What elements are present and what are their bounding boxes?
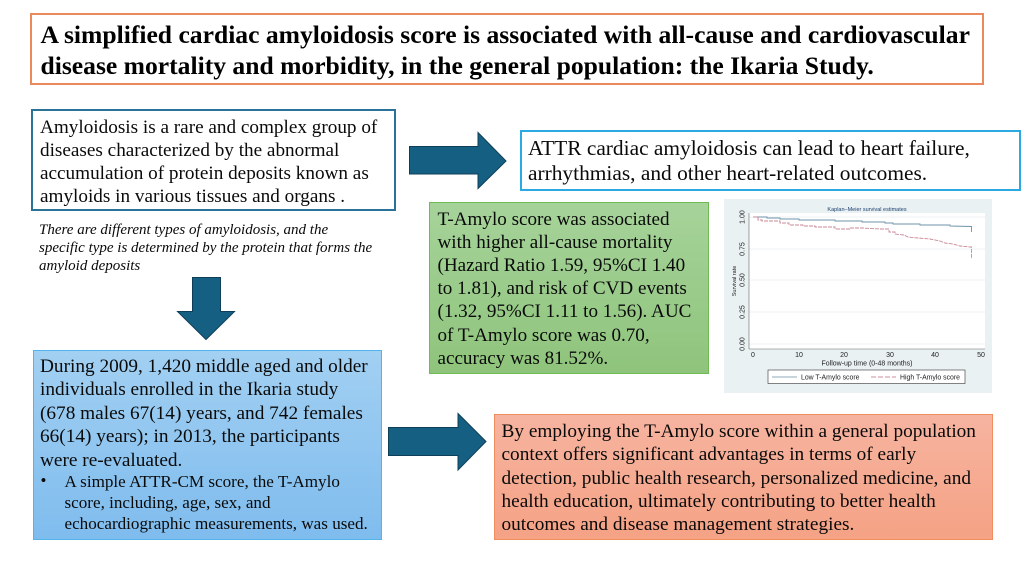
conclusion text: detection, public health research, personalized medicine, and [502,468,971,489]
high score curve [753,217,972,259]
title: disease mortality and morbidity, in the general population: the Ikaria Study. [40,51,874,80]
results text: with higher all-cause mortality [438,232,672,253]
conclusion text [502,421,976,535]
italic note on amyloidosis types [39,222,372,274]
methods bullet text: A simple ATTR-CM score, the T-Amylo [64,472,340,491]
low score curve [753,217,972,232]
panel: ATTR outcomes [520,130,1021,190]
panel: amyloidosis definition [31,109,396,211]
definition text: amyloids in various tissues and organs . [40,186,345,207]
italic note on amyloidosis types: There are different types of amyloidosis, and the [39,222,328,238]
axis labels: 0 [751,352,755,359]
conclusion text: context offers significant advantages in terms of early [502,444,916,465]
methods text: During 2009, 1,420 middle aged and older [40,356,368,377]
chart title: Kaplan–Meier survival estimates [827,207,907,213]
methods bullet text: echocardiographic measurements, was used. [64,514,368,533]
panel: conclusion [494,414,993,540]
results text: accuracy was 81.52%. [438,348,608,369]
axis labels: Survival rate [732,266,738,296]
axis labels: 0.50 [740,273,746,287]
methods text: 66(14) years); in 2013, the participants [40,426,340,447]
results text: (1.32, 95%CI 1.11 to 1.56). AUC [438,301,691,322]
ATTR text [528,136,970,184]
definition text: accumulation of protein deposits known as [40,163,369,184]
axes [749,213,985,349]
italic note on amyloidosis types: amyloid deposits [39,258,140,274]
definition text [40,116,378,207]
axis labels: 10 [795,352,803,359]
italic note on amyloidosis types: specific type is determined by the protein that forms the [39,240,372,256]
axis labels: 40 [931,352,939,359]
ATTR text: ATTR cardiac amyloidosis can lead to heart failure, [528,136,970,160]
axis labels: 0.75 [740,242,746,256]
methods text: individuals enrolled in the Ikaria study [40,379,338,400]
methods bullet: • [40,471,46,490]
ATTR text: arrhythmias, and other heart-related outcomes. [528,160,927,184]
conclusion text: health education, ultimately contributing to better health [502,491,936,512]
axis labels [732,210,985,368]
axis labels: 30 [886,352,894,359]
axis labels: 50 [977,352,985,359]
methods text [40,356,368,471]
results text: to 1.81), and risk of CVD events [438,278,687,299]
axis labels: 1.00 [740,210,746,224]
title box [30,13,984,85]
legend [768,370,965,384]
methods text: (678 males 67(14) years, and 742 females [40,403,363,424]
title [40,20,970,80]
axis labels: 0.00 [740,337,746,351]
results text [438,208,691,369]
panel: T-Amylo results [429,202,709,374]
definition text: diseases characterized by the abnormal [40,140,339,161]
axis labels: Follow-up time (0-48 months) [821,360,913,368]
conclusion text: outcomes and disease management strategies. [502,514,854,535]
title: A simplified cardiac amyloidosis score is associated with all-cause and cardiovascular [40,20,970,49]
methods text: were re-evaluated. [40,450,182,471]
legend: High T-Amylo score [900,374,960,382]
results text: T-Amylo score was associated [438,208,670,230]
results text: of T-Amylo score was 0.70, [438,325,650,346]
results text: (Hazard Ratio 1.59, 95%CI 1.40 [438,255,685,276]
chart: Kaplan-Meier survival curves [724,199,992,393]
methods bullet text [64,472,368,533]
panel: study methods [32,350,382,540]
axis labels: 20 [840,352,848,359]
methods bullet text: score, including, age, sex, and [64,493,271,512]
conclusion text: By employing the T-Amylo score within a general population [502,421,976,442]
axis labels: 0.25 [740,305,746,319]
definition text: Amyloidosis is a rare and complex group of [40,116,377,138]
legend: Low T-Amylo score [801,374,860,382]
